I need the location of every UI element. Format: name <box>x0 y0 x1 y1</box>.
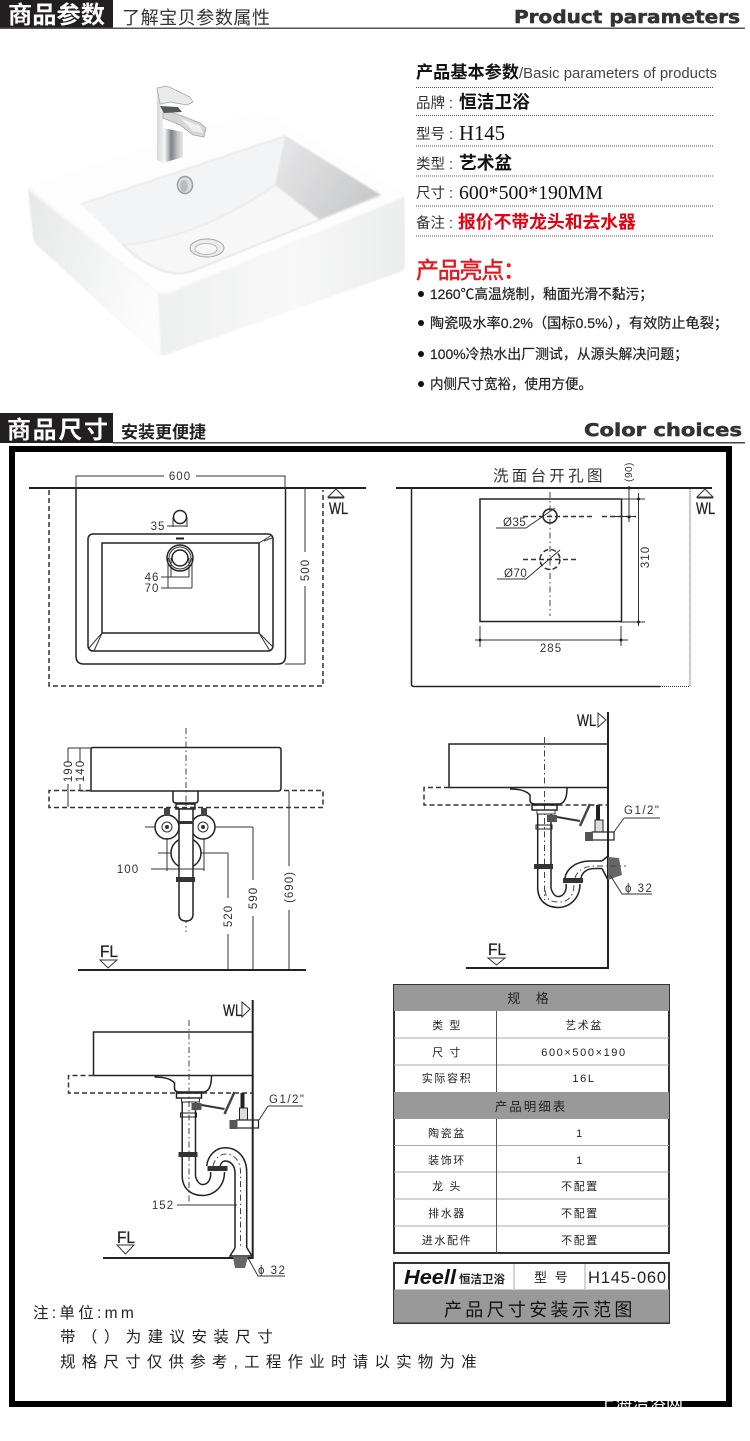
section header: product parameters <box>0 0 745 29</box>
icon: WL marker <box>696 489 715 518</box>
icon: chrome faucet <box>157 86 206 163</box>
icon: WL marker <box>328 489 348 518</box>
drawing: side elevation, wall drain: ϕ 32 <box>625 883 653 895</box>
drawing: front elevation with valves: 100 <box>117 864 139 876</box>
drawing: side elevation, wall drain: G1/2" <box>624 805 661 817</box>
notes: 注:单位:mm <box>33 1304 137 1322</box>
table: specification and parts list: 陶瓷盆 <box>428 1126 466 1140</box>
drawing: side elevation, wall drain <box>424 711 661 968</box>
table: specification and parts list: 不配置 <box>561 1180 599 1193</box>
logo: Heell <box>404 1267 505 1289</box>
bullet list: 内侧尺寸宽裕，使用方便。 <box>430 376 592 392</box>
product photo: white ceramic basin with faucet <box>28 86 405 356</box>
heading: basic parameters: /Basic parameters of products <box>519 65 717 82</box>
drawing: front elevation with valves: 190 <box>63 760 75 782</box>
heading: highlights: 产品亮点： <box>416 257 526 283</box>
row: remark: 备注 : <box>416 215 453 232</box>
drawing: countertop cut-out plan: 310 <box>640 546 652 568</box>
watermark clipped in frame: 上海洁浴网 <box>598 1394 683 1413</box>
section header: product parameters: Product parameters <box>514 7 740 28</box>
drawing: front elevation with valves: (690) <box>284 871 296 903</box>
row: remark: 报价不带龙头和去水器 <box>458 212 636 232</box>
row: model <box>416 121 505 145</box>
table: specification and parts list: 600×500×190 <box>541 1047 627 1059</box>
drawing: top view of basin: 35 <box>151 521 165 533</box>
title block: logo, model and caption: H145-060 <box>588 1269 667 1287</box>
drawing: top view of basin: 600 <box>169 471 191 483</box>
table: specification and parts list: 不配置 <box>561 1207 599 1220</box>
title block: logo, model and caption: 型 号 <box>534 1270 570 1285</box>
drawing: top view of basin <box>29 471 366 686</box>
icon: WL marker: WL <box>696 499 715 518</box>
icon: FL marker <box>117 1228 135 1254</box>
notes: 带（）为建议安装尺寸 <box>60 1328 276 1346</box>
table: specification and parts list: 1 <box>576 1155 584 1167</box>
drawing: front elevation with valves: 590 <box>248 887 260 909</box>
row: size: 600*500*190MM <box>459 182 603 204</box>
drawing: side elevation, floor drain: ϕ 32 <box>258 1265 286 1277</box>
section header: product size <box>0 413 745 444</box>
row: type: 类型 : <box>416 156 457 173</box>
table: specification and parts list: 进水配件 <box>422 1234 472 1247</box>
icon: FL marker: FL <box>488 940 506 959</box>
panel: product highlights <box>416 257 728 392</box>
drawing: front elevation with valves: 140 <box>75 760 87 782</box>
bullet list: 陶瓷吸水率0.2%（国标0.5%），有效防止龟裂； <box>430 315 728 332</box>
drawing: countertop cut-out plan <box>396 462 715 686</box>
row: type: 艺术盆 <box>459 153 512 173</box>
drawing: top view of basin: 46 <box>145 572 159 584</box>
row: size: 尺寸 : <box>416 185 453 202</box>
icon: WL marker: WL <box>329 499 348 518</box>
table: specification and parts list <box>394 985 669 1253</box>
table: specification and parts list: 16L <box>572 1073 596 1085</box>
icon: drain <box>190 239 224 257</box>
section header: product size: 安装更便捷 <box>121 423 206 442</box>
drawing: side elevation, floor drain: 152 <box>152 1200 174 1212</box>
row: brand: 品牌 : <box>416 95 457 112</box>
drawing: front elevation with valves: 520 <box>223 905 235 927</box>
panel: basic parameters <box>416 62 717 236</box>
drawing: front elevation with valves <box>49 728 323 970</box>
drawing: top view of basin: 70 <box>145 583 159 595</box>
heading: basic parameters: 产品基本参数 <box>416 62 519 82</box>
bullet list: 100%冷热水出厂测试，从源头解决问题； <box>430 346 688 363</box>
row: model: H145 <box>459 121 505 145</box>
row: brand: 恒洁卫浴 <box>459 92 530 112</box>
table: specification and parts list: 装饰环 <box>428 1153 466 1167</box>
table: specification and parts list: 类 型 <box>432 1018 462 1032</box>
icon: FL marker: FL <box>100 942 118 961</box>
row: model: 型号 : <box>416 126 453 143</box>
drawing: side elevation, floor drain: G1/2" <box>269 1094 306 1106</box>
icon: FL marker <box>100 942 118 968</box>
table: specification and parts list: 实际容积 <box>422 1071 472 1085</box>
drawing: top view of basin: 500 <box>300 559 312 581</box>
section header: product parameters: 了解宝贝参数属性 <box>122 8 270 28</box>
icon: WL marker: WL <box>223 1001 242 1020</box>
table: specification and parts list: 不配置 <box>561 1234 599 1247</box>
title: cut-out diagram: 洗面台开孔图 <box>493 467 606 485</box>
black frame around drawings <box>12 449 729 1404</box>
table: specification and parts list: 规 格 <box>507 991 555 1006</box>
table: specification and parts list: 1 <box>576 1128 584 1140</box>
bullet list: 1260℃高温烧制，釉面光滑不黏污； <box>430 286 653 303</box>
drawing: side elevation, floor drain <box>68 1000 306 1277</box>
heading: basic parameters <box>416 62 717 82</box>
table: specification and parts list: 龙 头 <box>432 1180 462 1193</box>
table: specification and parts list: 产品明细表 <box>495 1100 567 1114</box>
table: specification and parts list: 尺 寸 <box>432 1045 462 1059</box>
notes <box>33 1304 480 1371</box>
drawing: countertop cut-out plan: (90) <box>624 462 635 482</box>
table: specification and parts list: 排水器 <box>428 1206 466 1220</box>
section header: product size: Color choices <box>584 420 742 441</box>
icon: WL marker: WL <box>577 711 596 730</box>
title block: logo, model and caption <box>394 1263 669 1323</box>
drawing: countertop cut-out plan: 285 <box>540 643 562 655</box>
notes: 规格尺寸仅供参考,工程作业时请以实物为准 <box>60 1353 480 1371</box>
section header: product parameters: 商品参数 <box>8 1 105 29</box>
title block: logo, model and caption: 产品尺寸安装示范图 <box>444 1300 636 1320</box>
bullet list <box>418 286 728 392</box>
logo: Heell: Heell <box>404 1267 456 1289</box>
drawing: countertop cut-out plan: Ø35 <box>503 517 526 529</box>
section header: product size: 商品尺寸 <box>7 417 108 444</box>
logo: Heell: 恒洁卫浴 <box>459 1272 505 1286</box>
icon: overflow hole <box>178 176 192 194</box>
icon: FL marker: FL <box>117 1228 135 1247</box>
drawing: countertop cut-out plan: Ø70 <box>504 568 527 580</box>
table: specification and parts list: 艺术盆 <box>565 1018 603 1032</box>
